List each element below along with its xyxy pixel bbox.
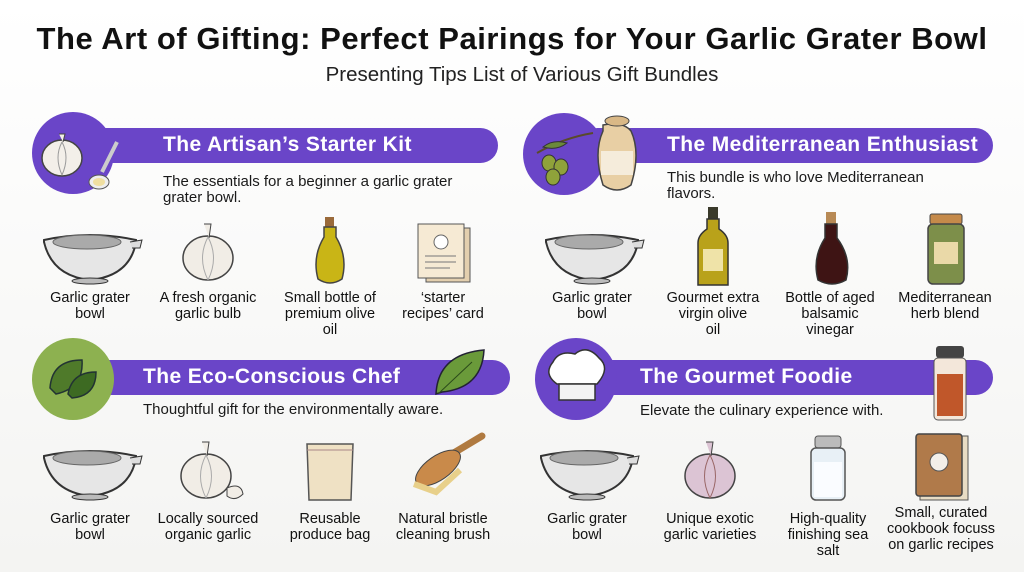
panel: gourmet foodie (535, 338, 995, 559)
item: sea salt: salt (817, 543, 839, 559)
icon circle: chef hat (535, 338, 617, 420)
item: olive oil: Small bottle of (284, 290, 376, 306)
item: extra virgin olive oil: Gourmet extra (667, 290, 759, 306)
description: The essentials for a beginner a garlic grater (163, 173, 452, 190)
description: Elevate the culinary experience with. (640, 402, 883, 419)
description (667, 169, 924, 202)
item: cookbook: Small, curated (895, 505, 987, 521)
item: grater bowl: bowl (577, 306, 607, 322)
item: bristle brush (396, 432, 490, 543)
item: sea salt: High-quality (790, 511, 866, 527)
item: extra virgin olive oil: oil (706, 322, 720, 338)
item: bristle brush: cleaning brush (396, 527, 490, 543)
item: exotic garlic: garlic varieties (664, 527, 756, 543)
item: organic garlic (158, 442, 258, 543)
item: grater bowl: Garlic grater (547, 511, 627, 527)
item: recipe card: recipes’ card (402, 306, 484, 322)
item: produce bag: produce bag (290, 527, 370, 543)
title: The Art of Gifting: Perfect Pairings for Your Garlic Grater Bowl (36, 21, 988, 56)
item: cookbook: cookbook focuss (887, 521, 995, 537)
icon: spice jar (934, 346, 966, 420)
item: extra virgin olive oil: virgin olive (679, 306, 747, 322)
item: herb blend: Mediterranean (898, 290, 992, 306)
item: exotic garlic (664, 442, 756, 543)
description: This bundle is who love Mediterranean (667, 169, 924, 186)
header bar (70, 360, 510, 395)
icon circle: garlic and spoon (32, 112, 114, 194)
item: grater bowl (540, 450, 640, 543)
item: grater bowl: bowl (572, 527, 602, 543)
panel: mediterranean enthusiast (523, 113, 993, 338)
item: cookbook (887, 433, 995, 553)
heading: The Eco-Conscious Chef (143, 365, 400, 388)
icon circle: leaves (32, 338, 114, 420)
heading: The Mediterranean Enthusiast (667, 133, 978, 156)
item: bristle brush: Natural bristle (398, 511, 488, 527)
icon circle: olives and jar (523, 113, 605, 195)
item: organic garlic: Locally sourced (158, 511, 258, 527)
item: sea salt (788, 436, 868, 559)
item: grater bowl: Garlic grater (552, 290, 632, 306)
item: recipe card (402, 224, 484, 322)
item: balsamic vinegar: vinegar (806, 322, 854, 338)
item: balsamic vinegar: balsamic (801, 306, 859, 322)
item: grater bowl (43, 450, 143, 543)
header bar (580, 128, 993, 163)
panel: artisan starter kit (32, 112, 498, 338)
item: produce bag (290, 443, 370, 543)
item: garlic bulb: garlic bulb (175, 306, 241, 322)
description: flavors. (667, 185, 715, 202)
item: olive oil: premium olive (285, 306, 375, 322)
item: balsamic vinegar (785, 212, 875, 338)
header bar (70, 128, 498, 163)
item: cookbook: on garlic recipes (888, 537, 994, 553)
item: extra virgin olive oil (667, 207, 760, 338)
item: exotic garlic: Unique exotic (666, 511, 754, 527)
subtitle: Presenting Tips List of Various Gift Bundles (326, 63, 718, 86)
item: grater bowl (43, 234, 143, 322)
item: balsamic vinegar: Bottle of aged (785, 290, 875, 306)
item: olive oil: oil (323, 322, 337, 338)
description: Thoughtful gift for the environmentally aware. (143, 401, 443, 418)
item: produce bag: Reusable (299, 511, 361, 527)
item: grater bowl: bowl (75, 306, 105, 322)
item: herb blend: herb blend (911, 306, 979, 322)
description (163, 173, 452, 206)
item: grater bowl (545, 234, 645, 322)
panel: eco-conscious chef (32, 338, 510, 543)
icon: leaf (435, 349, 485, 395)
item: olive oil (284, 217, 376, 338)
heading: The Artisan’s Starter Kit (163, 133, 412, 156)
description: grater bowl. (163, 189, 241, 206)
item: organic garlic: organic garlic (165, 527, 251, 543)
item: garlic bulb (160, 224, 256, 322)
item: garlic bulb: A fresh organic (160, 290, 256, 306)
item: herb blend (898, 214, 992, 322)
item: grater bowl: Garlic grater (50, 511, 130, 527)
heading: The Gourmet Foodie (640, 365, 853, 388)
item: recipe card: ‘starter (421, 290, 465, 306)
item: grater bowl: Garlic grater (50, 290, 130, 306)
item: sea salt: finishing sea (788, 527, 868, 543)
item: grater bowl: bowl (75, 527, 105, 543)
header bar (575, 360, 993, 395)
